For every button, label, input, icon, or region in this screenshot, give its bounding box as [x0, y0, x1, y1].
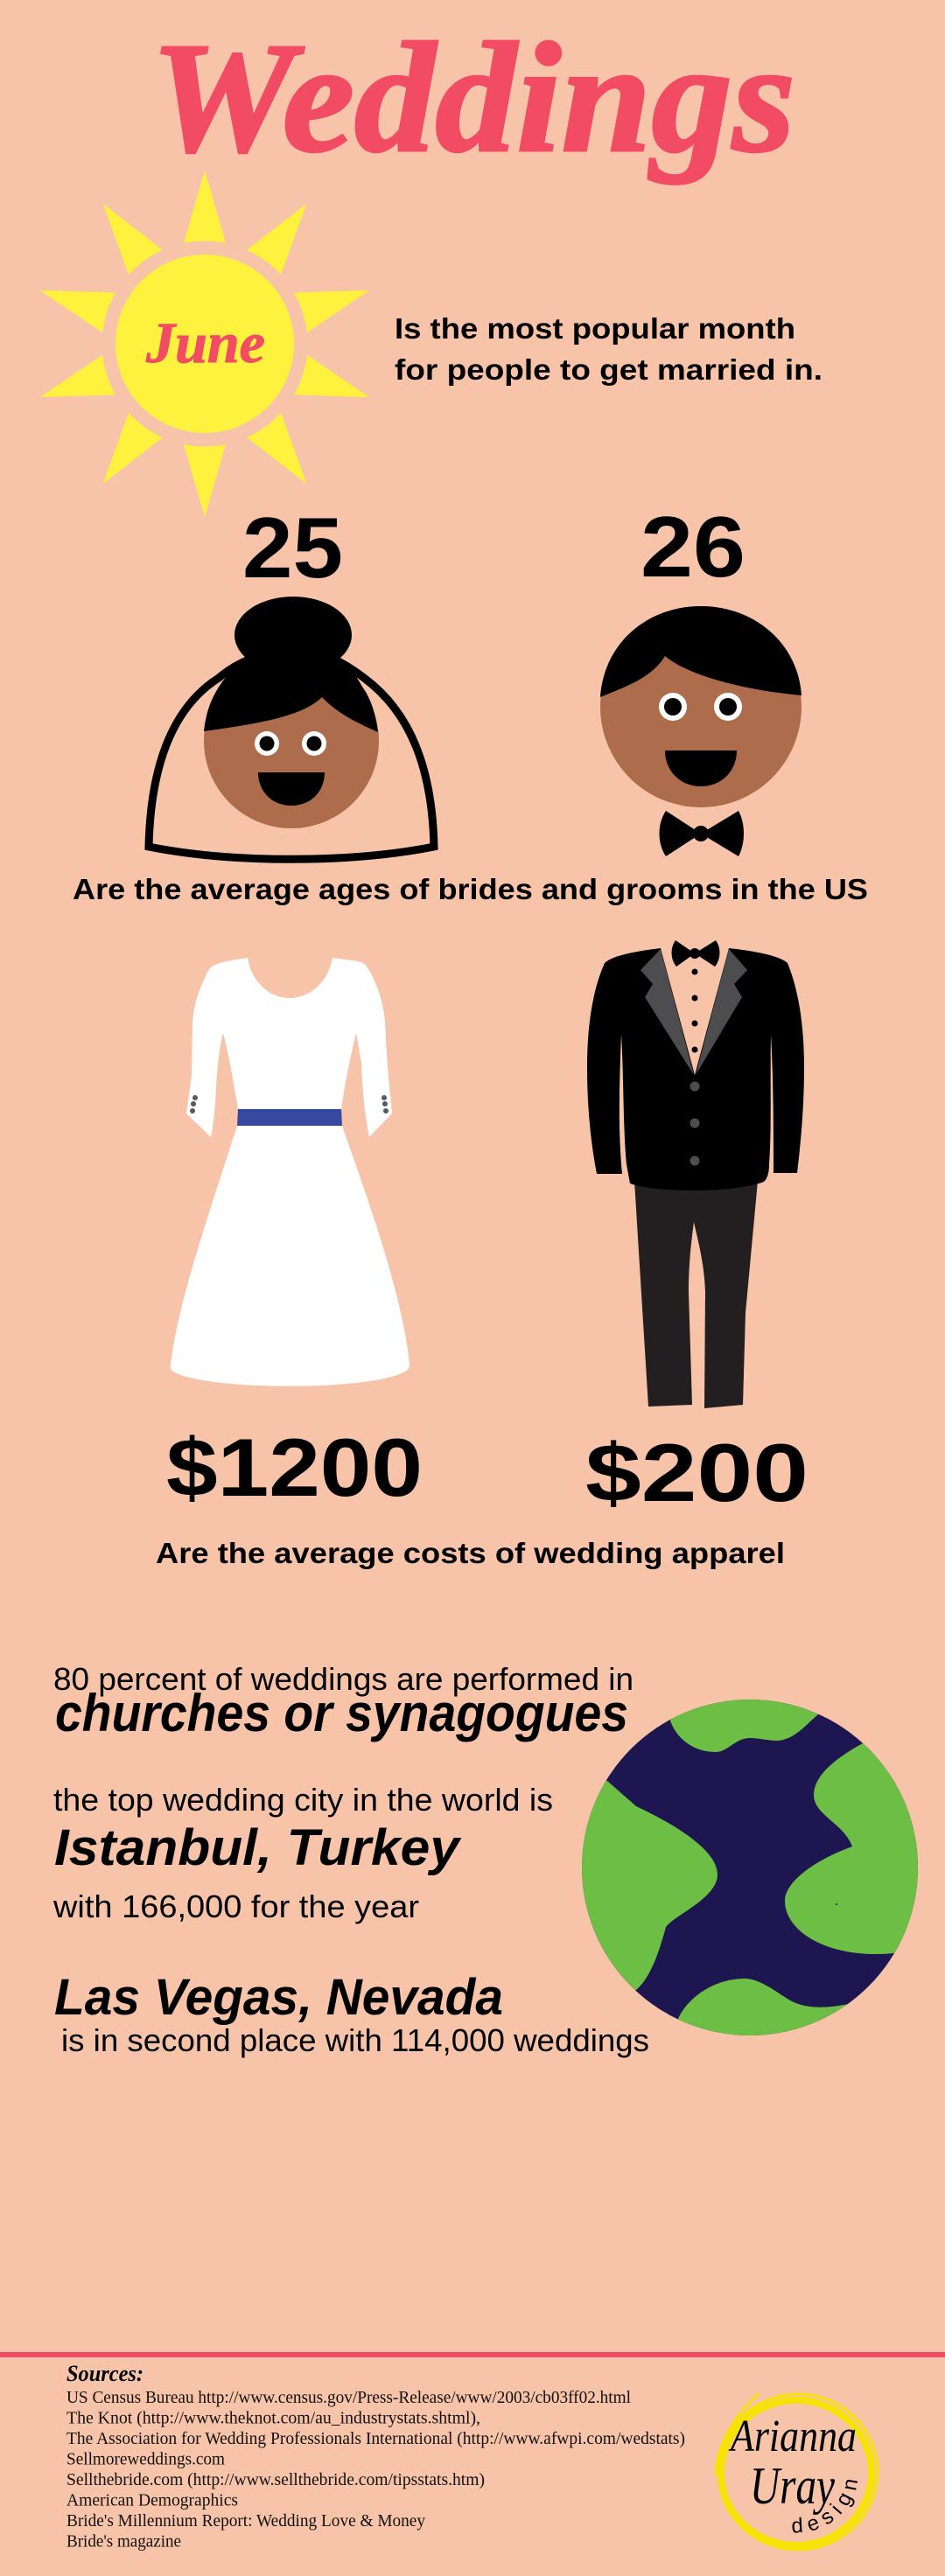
sources list: The Knot (http://www.theknot.com/au_industrystats.shtml), [66, 2409, 480, 2428]
text: Las Vegas statistic: is in second place with 114,000 weddings [61, 2022, 649, 2058]
icon: sun [33, 171, 376, 517]
sources list: Sellthebride.com (http://www.sellthebride.com/tipsstats.htm) [66, 2470, 485, 2489]
icon: bride [149, 597, 434, 859]
footer rule [0, 2352, 945, 2357]
sources list: American Demographics [66, 2491, 238, 2510]
dress belt [237, 1109, 342, 1126]
text: Las Vegas statistic: Las Vegas, Nevada [54, 1969, 503, 2026]
text: Istanbul statistic: Istanbul, Turkey [54, 1819, 462, 1876]
sources list [66, 2388, 685, 2551]
text block: most popular month: for people to get married in. [395, 353, 822, 386]
logo name: Uray: Uray [750, 2457, 835, 2515]
panel: June sun [33, 171, 822, 517]
sources heading: Sources: [66, 2361, 144, 2386]
text: churches statistic [53, 1661, 634, 1742]
number: dress cost: $1200 [166, 1421, 423, 1513]
logo: Arianna Uray design [714, 2392, 878, 2551]
dress sleeve buttons [190, 1095, 388, 1113]
number: groom age: 26 [640, 499, 746, 595]
text: Las Vegas statistic [54, 1969, 649, 2058]
tuxedo lapels [640, 949, 747, 1075]
logo word: design: design [792, 2480, 858, 2533]
text: Istanbul statistic [52, 1782, 553, 1924]
number: tuxedo cost: $200 [585, 1427, 808, 1518]
icon: tuxedo [587, 940, 804, 1408]
sources list: US Census Bureau http://www.census.gov/Press-Release/www/2003/cb03ff02.html [66, 2388, 631, 2407]
tuxedo bow tie [672, 940, 719, 967]
text: churches statistic: churches or synagogues [55, 1684, 628, 1742]
icon: globe [582, 1700, 918, 2035]
caption: average ages: Are the average ages of brides and grooms in the US [73, 873, 868, 905]
sources list: Sellmoreweddings.com [66, 2449, 225, 2468]
sources list: Bride's Millennium Report: Wedding Love & Money [66, 2511, 425, 2531]
panel: average ages [73, 499, 868, 905]
text block: most popular month [395, 312, 822, 386]
text: Istanbul statistic: the top wedding city in the world is [53, 1782, 553, 1818]
logo ring [716, 2393, 878, 2550]
caption: apparel costs: Are the average costs of wedding apparel [156, 1537, 785, 1569]
icon: wedding dress [171, 958, 410, 1386]
text block: most popular month: Is the most popular month [395, 312, 795, 345]
title: Weddings [150, 10, 795, 185]
tuxedo jacket buttons [690, 1081, 700, 1165]
sources list: Bride's magazine [66, 2531, 181, 2551]
panel: sources [66, 2361, 685, 2551]
text: churches statistic: 80 percent of weddings are performed in [53, 1661, 634, 1697]
panel: locations [52, 1661, 936, 2058]
logo name: Arianna: Arianna [728, 2412, 857, 2461]
text: Istanbul statistic: with 166,000 for the year [52, 1888, 419, 1924]
sources list: The Association for Wedding Professionals International (http://www.afwpi.com/wedstats) [66, 2429, 685, 2448]
number: bride age: 25 [242, 499, 343, 596]
sun label: June: June [145, 311, 265, 375]
tuxedo shirt studs [691, 969, 698, 1053]
icon: groom [600, 606, 802, 856]
panel: apparel costs [156, 940, 808, 1569]
